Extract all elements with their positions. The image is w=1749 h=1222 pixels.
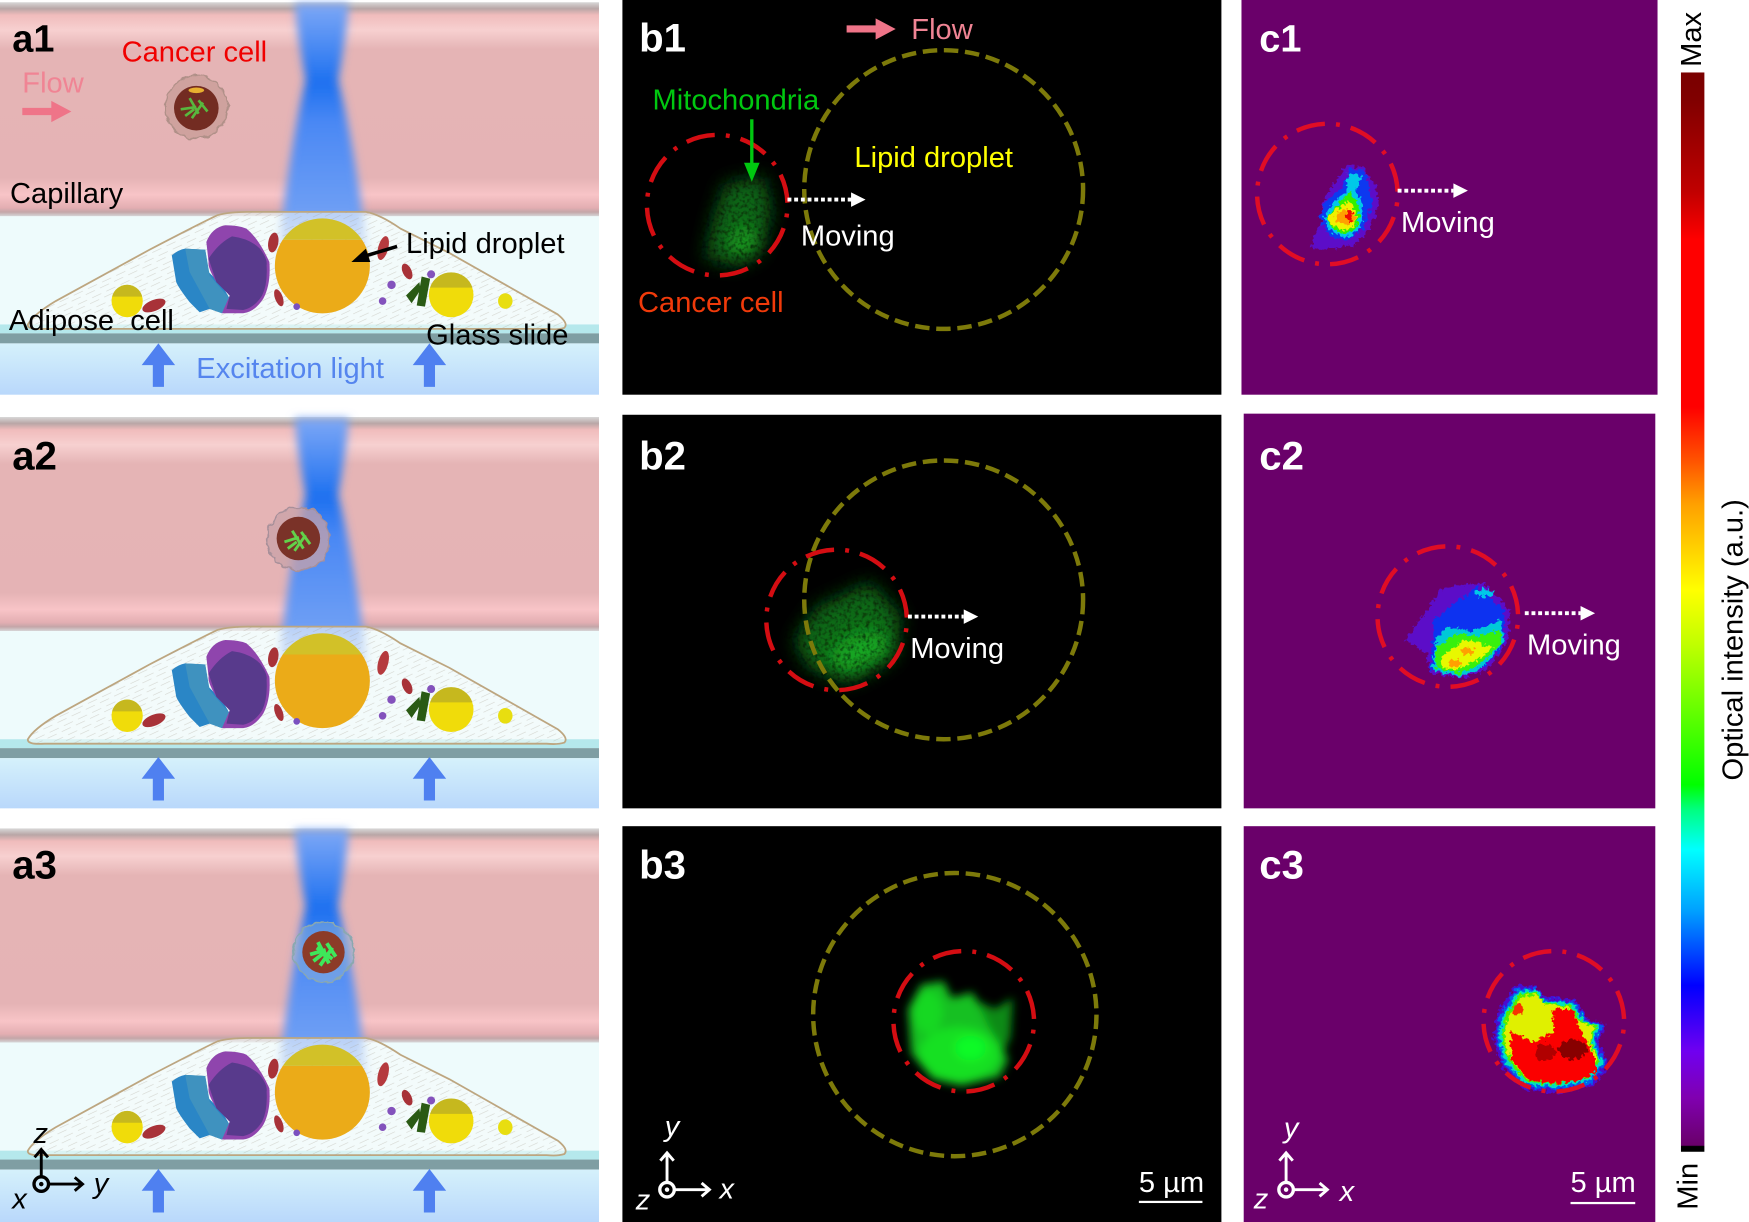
panel: a1 schematic [0, 2, 599, 395]
panel: b1 fluorescence image [622, 0, 1221, 395]
label mitochondria: Mitochondria [653, 84, 820, 116]
panel: a3 schematic [0, 828, 599, 1222]
axes: x y z: x [1338, 1176, 1356, 1208]
label capillary: Capillary [10, 178, 124, 210]
label c2: c2 [1259, 433, 1304, 478]
flow arrow [847, 18, 896, 40]
heat signal [1310, 165, 1380, 250]
moving arrow [908, 609, 978, 624]
label moving: Moving [1527, 629, 1621, 661]
panel: b2 fluorescence image [622, 415, 1221, 808]
label b3: b3 [639, 843, 686, 888]
cancer cell outline [647, 135, 787, 275]
axes: x y z: z [1253, 1184, 1269, 1216]
axes: x y z: y [663, 1111, 681, 1143]
excitation arrow right [413, 343, 446, 387]
adipose cell [28, 627, 566, 744]
label a2: a2 [12, 433, 57, 478]
mitochondria arrow [744, 119, 760, 182]
lipid droplet outline [813, 873, 1096, 1156]
excitation arrow left [142, 1169, 175, 1213]
label excitation light: Excitation light [196, 353, 384, 385]
axes: x y z: z [635, 1185, 651, 1217]
panel: a2 schematic [0, 417, 599, 808]
label optical intensity: Optical intensity (a.u.) [1717, 499, 1749, 780]
moving arrow [787, 192, 866, 207]
label moving: Moving [1401, 207, 1495, 239]
adipose cell [28, 212, 566, 329]
label moving: Moving [801, 220, 895, 252]
panel: c3 intensity map [1244, 826, 1655, 1222]
label flow: Flow [911, 14, 974, 46]
panel: b3 fluorescence image [622, 826, 1221, 1222]
cancer cell [165, 76, 228, 138]
label a1: a1 [12, 18, 54, 60]
label b2: b2 [639, 433, 686, 478]
cancer cell [267, 507, 330, 570]
label c3: c3 [1259, 843, 1304, 888]
excitation beam [277, 418, 369, 682]
heat signal [1493, 986, 1609, 1093]
axes: x y z: x [717, 1174, 735, 1206]
arrow: lipid droplet pointer [351, 246, 397, 262]
label cancer cell: Cancer cell [122, 36, 267, 68]
label glass slide: Glass slide [426, 320, 568, 352]
axes: x y z: x [10, 1184, 28, 1216]
label cancer cell: Cancer cell [638, 287, 784, 319]
cancer cell outline [893, 951, 1034, 1092]
label b1: b1 [639, 15, 686, 60]
mitochondria signal [908, 981, 1013, 1086]
axes: x y z [1253, 1112, 1356, 1216]
cancer cell outline [1484, 951, 1624, 1092]
cancer cell outline [766, 550, 907, 690]
excitation beam [277, 830, 369, 1094]
axes: x y z: z [32, 1118, 48, 1150]
scale bar: 5 µm [1139, 1167, 1204, 1199]
panel: c2 intensity map [1244, 414, 1655, 808]
label flow: Flow [22, 68, 85, 100]
adipose cell [28, 1038, 566, 1155]
axes: x y z [10, 1118, 110, 1216]
excitation arrow right [413, 1169, 446, 1213]
scale bar: 5 µm [1571, 1167, 1636, 1199]
mitochondria signal [705, 176, 772, 265]
axes: x y z [635, 1111, 735, 1217]
mitochondria signal [794, 582, 901, 682]
cancer cell outline [1257, 124, 1398, 264]
label max: Max [1676, 11, 1708, 67]
cancer cell outline [1378, 546, 1518, 687]
label moving: Moving [910, 633, 1004, 665]
lipid droplet outline [804, 460, 1083, 739]
panel: c1 intensity map [1241, 0, 1658, 395]
excitation arrow left [142, 343, 175, 387]
excitation arrow left [142, 757, 175, 801]
heat signal [1405, 583, 1510, 678]
label lipid droplet: Lipid droplet [406, 228, 565, 260]
label c1: c1 [1259, 18, 1302, 60]
cancer cell [293, 922, 354, 982]
colour bar [1681, 72, 1704, 1152]
moving arrow [1398, 183, 1468, 198]
lipid droplet outline [804, 50, 1083, 329]
label min: Min [1673, 1163, 1705, 1210]
excitation arrow right [413, 757, 446, 801]
excitation beam [277, 3, 369, 268]
label adipose cell: Adipose cell [9, 305, 174, 337]
label a3: a3 [12, 843, 57, 888]
flow arrow [22, 101, 71, 122]
label lipid droplet: Lipid droplet [854, 142, 1013, 174]
axes: x y z: y [1282, 1112, 1300, 1144]
axes: x y z: y [92, 1168, 110, 1200]
moving arrow [1525, 606, 1595, 620]
